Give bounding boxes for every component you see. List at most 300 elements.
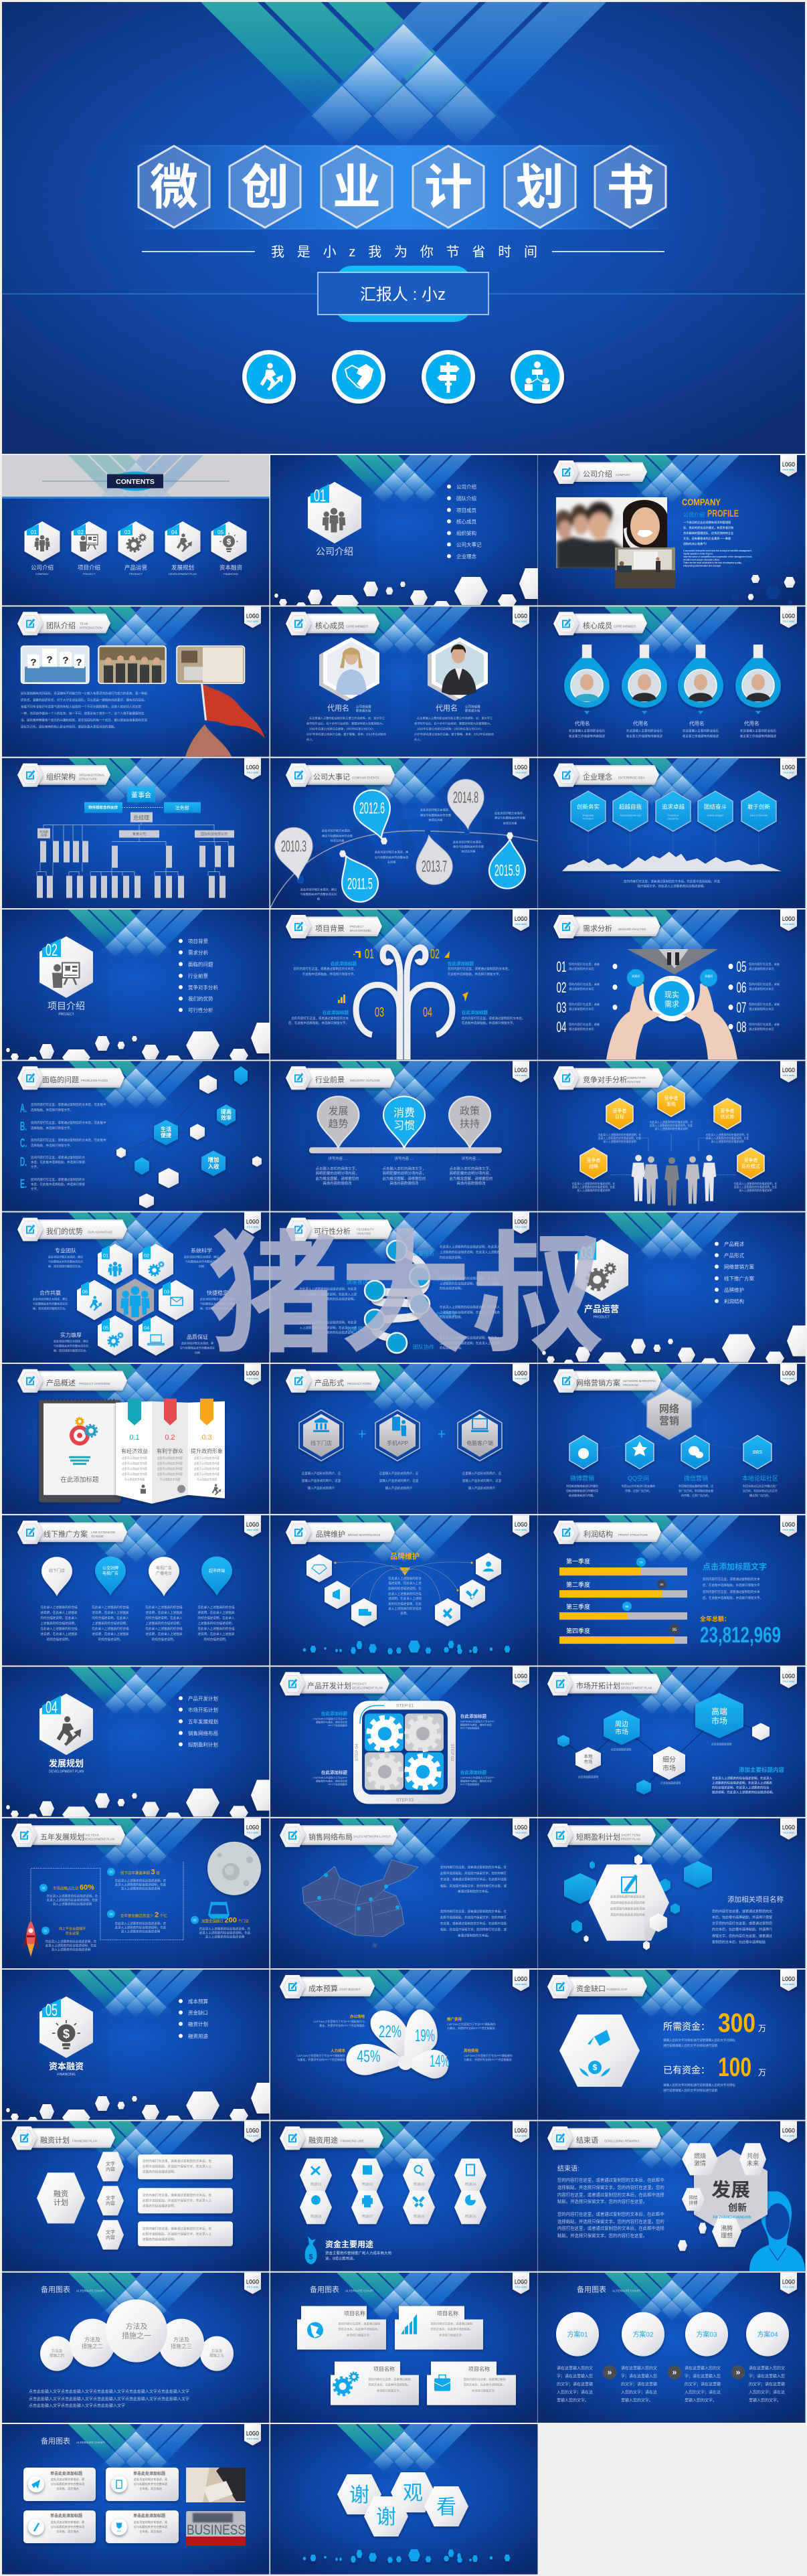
- section numbers: 04: [171, 529, 177, 535]
- card text: 言风格，语言描述: [56, 2486, 80, 2491]
- side heading: 点击添加标题文字: [703, 1561, 767, 1571]
- header tab: 融资计划: [40, 2136, 70, 2144]
- member paragraphs: 在这里输入主要的职业经历和主要工作成绩等，如：某大学工: [417, 715, 492, 720]
- title text: 微: [150, 161, 198, 215]
- small hexagons: 内容: [106, 2234, 115, 2240]
- available funding text: 进行说明请输入您的文字对目标进行说明: [663, 2088, 717, 2093]
- petal percentages: [357, 2023, 450, 2071]
- card text: 此处添加详细文本描述，建: [51, 2477, 85, 2482]
- left text: [569, 962, 600, 1031]
- closing paragraph 1: 粘贴，并选择只保留文字。您的内容打在这里。: [557, 2198, 647, 2204]
- logo flag: TITLE HERE: [515, 1226, 527, 1229]
- slide: brand maintenance: [270, 1515, 538, 1666]
- centre text: 图表的综合描述说明，在: [388, 1586, 422, 1591]
- thanks characters: [349, 2482, 456, 2528]
- plan text 4: 请在这里输入您的文: [749, 2366, 785, 2371]
- org connectors: [37, 823, 228, 876]
- idea labels: [577, 804, 770, 821]
- event descriptions: 此处添加详细文本描述，: [322, 829, 353, 833]
- available funding: 100: [718, 2053, 751, 2082]
- right text: 您的内容打在这里，或者: [749, 962, 780, 966]
- hexagon labels: 优劣势: [720, 1114, 735, 1120]
- logo flag: [513, 1818, 529, 1840]
- member paragraphs: 商学院毕业后，有十余年行业经验，掌握领导能力及管理能力。: [414, 721, 492, 725]
- plan labels: [567, 2330, 778, 2339]
- use icons: [310, 2164, 476, 2207]
- reporter box: 汇报人 : 小z: [360, 286, 446, 304]
- hexagon labels: 入收: [207, 1163, 219, 1170]
- step text right top: [460, 1713, 495, 1729]
- contents badge: [42, 471, 230, 491]
- card text: 此框中选择粘贴，并选择只保留文字。在此录入上: [143, 2164, 211, 2168]
- advantage text: 格，语言描述尽量简洁生动。: [54, 1348, 88, 1352]
- pin text 3: [145, 1605, 183, 1642]
- section labels: 项目介绍: [78, 564, 100, 571]
- channel icons: [578, 1442, 762, 1459]
- event bubble 2015.9: [488, 837, 528, 890]
- quadrant text 4: [462, 1009, 525, 1025]
- card headings: 项目名称: [468, 2366, 490, 2373]
- header tab: [286, 1521, 395, 1544]
- card text: 您的内容打在这里，或者通过复制您的文本后，在: [143, 2158, 211, 2163]
- section hexagons: [24, 521, 246, 562]
- chart title: [41, 2285, 105, 2294]
- card text: [339, 2322, 505, 2393]
- step text left bottom: 在此添加标题: [321, 1769, 348, 1775]
- plan labels: 方案04: [757, 2330, 778, 2339]
- rocket: [23, 1921, 39, 1957]
- event bubble 2013.7: [411, 832, 455, 887]
- pin: development trend: 发展: [328, 1106, 349, 1117]
- chapter label: [49, 1758, 84, 1774]
- channel labels: [570, 1474, 778, 1482]
- card text: 您的文本后，在此框中选择粘贴，: [339, 2327, 380, 2332]
- main hexagon text: 此处添加标题内容此处此处: [610, 1895, 645, 1899]
- available funding: 万: [758, 2068, 766, 2077]
- fold titles: 有经济效益: [121, 1448, 148, 1454]
- fold text: 这里可以添加文字内容: [122, 1467, 147, 1470]
- plan labels: 方案01: [567, 2330, 588, 2339]
- header tab: FINANCING PLAN: [72, 2139, 97, 2142]
- slide: chapter 03: [538, 1213, 807, 1369]
- event descriptions: 格: [317, 897, 321, 901]
- advantage text: 此处添加详细文本描述，建议: [54, 1339, 88, 1343]
- logo flag: LOGO: [246, 612, 259, 619]
- header tab: COMPANY: [616, 473, 630, 477]
- header tab: SHORT TERM: [621, 1834, 640, 1837]
- slide: five year plan: [2, 1818, 269, 1968]
- department labels: 国际科技有限公司: [201, 832, 228, 837]
- quadrant text 2: 您的内容打在这里，或者通过复制您的文本后，: [448, 966, 511, 971]
- problem letters: E.: [20, 1177, 27, 1191]
- pin text 3: 上述图表的综合描述说明，: [145, 1621, 183, 1626]
- timeline markers: [297, 828, 513, 883]
- use labels: 用途05: [464, 2213, 476, 2219]
- callout staff: 与美化，并提供专业的PPT个性定制服务: [297, 2057, 345, 2061]
- chart text: 点击此处输入文字点击此处输入文字点击此处输入文字: [29, 2403, 125, 2409]
- member captions: 职务或头衔: [356, 708, 371, 713]
- method labels: 措施之四: [50, 2353, 64, 2358]
- left text: 通过复制您的文本后: [569, 966, 594, 971]
- market labels: 细分: [662, 1755, 676, 1764]
- logo flag: TITLE HERE: [515, 1377, 527, 1380]
- fold titles: 0.3: [201, 1434, 212, 1442]
- team paragraph: 一样，共同协作维持一个人的生存，缺一不可。如果没有了其中一个，这个人将不能健康的生: [21, 711, 145, 715]
- contents badge: CONTENTS: [116, 478, 155, 486]
- quadrant text 1: [293, 960, 357, 976]
- logo flag: [513, 1213, 529, 1234]
- header tab: NETWORK MARKETING: [623, 1379, 656, 1383]
- company text: 念，良好的资金运作模式，有竞争意识和: [683, 525, 733, 530]
- slide: alternate chart cards: [270, 2273, 538, 2423]
- fold text: 这里可以添加文字内容: [122, 1456, 147, 1460]
- petal percentages: 14%: [430, 2052, 450, 2071]
- advantage text: 此处添加详细文本描述，建议: [48, 1254, 83, 1258]
- header tab: [17, 612, 110, 635]
- member paragraphs: 2007年担任某公司执行总裁，善于策略、思考，2012年任创始合: [414, 732, 495, 736]
- pin text column 3: 此为概念图解，请根据您的: [450, 1176, 492, 1181]
- bullet list: 面临的问题: [188, 961, 213, 968]
- photo: business team: [98, 646, 166, 683]
- member text: [569, 728, 776, 738]
- card text: 您的内容打在这里，或者通过复制: [339, 2322, 380, 2326]
- chart text: [29, 2389, 189, 2409]
- side text: 您的内容打在这里，或者通过复制您的文: [712, 1909, 772, 1914]
- side text: 文字您的内容打在这里，或者通过复制您: [712, 1921, 772, 1926]
- slide: chapter 02: [2, 910, 278, 1066]
- fold text: 这里可以添加文字内容: [194, 1456, 219, 1460]
- chapter label: 产品运营: [584, 1304, 619, 1314]
- fold pages: [116, 1401, 225, 1504]
- advantage text: 风格: [195, 1351, 200, 1355]
- header tab: BRAND MAINTENANCE: [348, 1533, 381, 1537]
- pin text 4: 在此录入上述图表的综合描: [197, 1626, 235, 1631]
- bullet list: 需求分析: [188, 949, 208, 956]
- header tab: [280, 1975, 375, 1998]
- member names: [575, 719, 759, 726]
- left text: 通过复制您的文本后: [569, 1027, 594, 1031]
- logo flag: LOGO: [515, 1824, 527, 1831]
- pin text 3: 在此录入上述图表的综合描: [145, 1626, 183, 1631]
- market labels: 高端: [711, 1706, 727, 1716]
- thanks characters: 看: [436, 2496, 456, 2518]
- market labels: 市场: [584, 1758, 593, 1764]
- node text: [300, 1245, 500, 1351]
- quadrant text 4: 在此框中选择粘贴，并选择只保留文字。: [462, 1021, 516, 1025]
- logo flag: LOGO: [782, 1672, 795, 1679]
- header tab: DEVELOPMENT PLAN: [352, 1686, 383, 1689]
- centre text: 此录入上述图表的综合描: [388, 1592, 422, 1596]
- side text: 描述说明，在此录入上述图表的综合描述说明。: [712, 1790, 775, 1794]
- node text: 上述图表的综合描述说明，在此录入上述图表: [440, 1281, 500, 1286]
- team paragraph: 目标为己任。团队精神的核心是合作协同，使团队最大发挥创造的潜能。: [21, 724, 117, 729]
- card headings: 项目名称: [437, 2310, 458, 2317]
- quarter 1 bar: 70: [639, 1561, 643, 1564]
- cluster labels: 燃烧: [694, 2152, 706, 2159]
- plan item 01: [41, 1927, 97, 1952]
- header tab: 企业理念: [583, 772, 612, 782]
- header tab: [547, 1824, 656, 1847]
- hexagon labels: 竞争者: [613, 1108, 626, 1114]
- hexagon labels: 竞争者: [720, 1108, 735, 1114]
- logo flag: LOGO: [782, 1370, 795, 1377]
- dotted connectors: [610, 1134, 735, 1175]
- step text left bottom: 模板制作与美化，拥有符合您: [316, 1779, 347, 1782]
- slide: concluding remarks: [538, 2121, 806, 2271]
- pin text 2: 述说明，在此录入上述图表: [92, 1610, 129, 1615]
- left text: 您的内容打在这里，或者: [569, 1022, 600, 1027]
- header tab: [547, 1672, 661, 1695]
- event bubble 2010.3: 2010.3: [281, 838, 306, 856]
- logo flag: LOGO: [515, 1218, 527, 1225]
- chapter hexagon: [308, 482, 361, 543]
- closing paragraph 2: 您的内容打在这里，或者通过复制您的文本后，在此框中: [557, 2211, 664, 2217]
- member text: 和主要工作成绩等内容描述: [683, 734, 719, 738]
- logo flag: TITLE HERE: [247, 2134, 258, 2137]
- thanks characters: 观: [403, 2482, 423, 2504]
- closing paragraph 1: 内容打在这里，或者通过复制您的文本后，在此框中选择: [557, 2191, 664, 2197]
- inbox icon: [208, 1902, 230, 1919]
- callout office: [313, 2014, 365, 2027]
- hands holding circle: [606, 976, 737, 1059]
- logo flag: LOGO: [782, 461, 795, 468]
- plan text 2: 字；请在这里输入您: [621, 2374, 657, 2379]
- side heading: 添加主要标题内容: [739, 1766, 784, 1773]
- slide: our advantage: [2, 1213, 269, 1363]
- card text: 您的内容打在这里，或者通过复制: [464, 2377, 505, 2382]
- hexagon descriptions: 录入上述图表的综合描述说明: [739, 1189, 772, 1192]
- node text: 上述图表的综合描述说明，在此录入上述图表: [440, 1250, 500, 1254]
- advantage text: 与标题相关并符合整体语言风: [33, 1301, 68, 1305]
- problem letters: B.: [20, 1120, 27, 1133]
- side text top: 者通过复制您的文本后。: [458, 1889, 491, 1894]
- step text right bottom: 在此添加标题: [460, 1769, 487, 1775]
- logo flag: TITLE HERE: [515, 620, 527, 622]
- header tab: [286, 612, 379, 635]
- company text: capital operation mode of good,: [683, 553, 713, 555]
- bullet list: 市场开拓计划: [188, 1706, 218, 1713]
- plan text 1: 的文字；请在这里输: [557, 2382, 593, 2387]
- bottom dots: [302, 1640, 510, 1654]
- photo: question marks: ?: [46, 654, 53, 665]
- plan text 4: 里输入您的文字。: [749, 2398, 781, 2403]
- slide: problems faced: [2, 1061, 269, 1211]
- chart title: [41, 2436, 105, 2445]
- pin: consumption habit: 习惯: [393, 1120, 415, 1132]
- problem text: 您的内容打在这里，或者通过复制您的文本后，在此框中: [31, 1138, 106, 1142]
- slide: company profile: [538, 455, 806, 605]
- event descriptions: 此处添加详细文本描述，: [420, 808, 451, 812]
- idea labels: United struggle: [707, 814, 723, 817]
- main hexagon: 营销: [659, 1415, 679, 1427]
- slide: market development plan: [538, 1666, 806, 1817]
- logo flag: LOGO: [246, 1521, 259, 1528]
- fold icons: [141, 1484, 221, 1495]
- closing paragraph 2: 内容打在这里，或者通过复制您的文本后，在此框中选择: [557, 2225, 664, 2231]
- plan item 01: 01: [43, 1929, 48, 1933]
- hexagon descriptions: 此录入上述图表的综合描述说明，在此: [706, 1136, 749, 1140]
- slide: feasibility analysis: [270, 1213, 538, 1363]
- connectors: [79, 2171, 97, 2231]
- hexagon field: [274, 568, 546, 612]
- section tags: [27, 524, 226, 535]
- card text: 此处添加详细文本描述，建: [51, 2520, 85, 2524]
- small hexagons: 文字: [106, 2195, 115, 2201]
- logo flag: TITLE HERE: [515, 772, 527, 774]
- node labels: [347, 1250, 457, 1351]
- card text: 述图表的综合描述说明。: [143, 2203, 177, 2208]
- logo flag: TITLE HERE: [783, 2134, 794, 2137]
- right text: 通过复制您的文本后: [749, 1007, 774, 1011]
- thanks hexagons: [337, 2472, 468, 2537]
- company heading: 公司介绍: [683, 511, 705, 518]
- member paragraphs: 伙人。: [306, 738, 315, 741]
- card text: 议与标题相关并符合整体语: [51, 2482, 84, 2486]
- callout other: [464, 2048, 513, 2061]
- summary text: [624, 879, 720, 889]
- logo flag: LOGO: [246, 1218, 259, 1225]
- card text: 并选择只保留文字。: [439, 2333, 464, 2338]
- slide: organisation chart: [2, 758, 269, 908]
- node text: 的综合描述说明。: [440, 1286, 464, 1290]
- card text: 言风格，语言描述: [139, 2529, 163, 2534]
- pin text 1: 的综合描述说明。: [47, 1637, 71, 1642]
- section numbers: [31, 530, 223, 534]
- product labels: 手机APP: [387, 1440, 408, 1446]
- product text: 里输入产品形式的简介，这里: [379, 1478, 419, 1483]
- step text left top: 在此添加标题: [321, 1710, 348, 1716]
- fold text: 这里可以添加文字内容: [157, 1456, 183, 1460]
- event descriptions: 此处添加详细文本描述，建议: [300, 887, 337, 892]
- chapter hexagon: 04: [46, 1698, 58, 1717]
- gears: [369, 1717, 439, 1788]
- photo: call centre: [554, 497, 667, 570]
- card headings: 单击此处添加标题: [50, 2471, 82, 2476]
- pin labels: 公交站牌: [102, 1565, 118, 1571]
- photo: question marks: ?: [62, 655, 69, 666]
- hexagon descriptions: 录入上述图表的综合描述说明: [711, 1140, 744, 1143]
- main hexagon text: 添加内容此处此处添加内容: [610, 1901, 645, 1905]
- problem text: 文字。: [31, 1187, 40, 1191]
- advantage labels: 品质保证: [187, 1333, 208, 1340]
- member text: 和主要工作成绩等内容描述: [569, 734, 605, 738]
- company heading: [682, 497, 739, 519]
- slide: sales network: [270, 1818, 538, 1968]
- chapter label: [49, 2061, 84, 2077]
- centre text: 述说明，在此录入上述图: [388, 1596, 422, 1601]
- slide: cost budget: [270, 1970, 538, 2120]
- bullet list: 我们的优势: [188, 995, 213, 1002]
- bullet list: 五年发展规划: [188, 1718, 218, 1725]
- closing paragraph 2: [557, 2211, 664, 2238]
- chart title: ALTERNATE CHART: [76, 2441, 105, 2444]
- market labels: [584, 1706, 727, 1772]
- company text: 进取的决心和勇气！: [683, 541, 709, 546]
- side text top: 您的内容打在这里，或者通过复制您的文本后，在: [440, 1865, 507, 1870]
- header tab: 组织架构: [46, 772, 76, 782]
- fold text: 这里可以添加文字内容: [157, 1472, 183, 1476]
- title hexagons: [139, 146, 666, 228]
- plan item 03: 录入上述图表的综合描述说明: [121, 1887, 161, 1891]
- bullet list: 产品形式: [724, 1252, 744, 1258]
- header tab: INTRODUCTION: [80, 626, 102, 629]
- quarter 4 bar: 95: [672, 1628, 677, 1632]
- logo flag: TITLE HERE: [783, 923, 794, 926]
- closing paragraph 1: 您的内容打在这里，或者通过复制您的文本后，在此框中: [557, 2176, 664, 2182]
- problem text: 选择粘贴，并选择只保留文字。: [31, 1126, 73, 1130]
- china map: [302, 1860, 418, 1948]
- closing heading: 结束语:: [557, 2164, 579, 2172]
- pin text 2: 在此录入上述图表的综合描: [92, 1626, 129, 1631]
- bullet list: 公司介绍: [456, 483, 476, 490]
- method labels: 方法及: [52, 2348, 63, 2354]
- small cyan circles: [627, 969, 717, 986]
- logo flag: [513, 606, 529, 628]
- header tab: 融资用途: [308, 2135, 338, 2144]
- card icons: [307, 2314, 450, 2395]
- chapter label: PRODUCT: [594, 1316, 610, 1320]
- step text right bottom: CAPTAIN工作室致力于专业PPT: [460, 1776, 495, 1779]
- plan item 04: [107, 1910, 167, 1934]
- plan item 02: 02: [41, 1887, 46, 1890]
- info cards: [23, 2468, 179, 2543]
- plan item 02: [39, 1884, 98, 1907]
- chapter hexagon: [39, 936, 93, 998]
- bullet list: 项目背景: [188, 938, 208, 944]
- company heading: PROFILE: [707, 508, 739, 519]
- company text: A successful enterprise must have the concept of scientific management,: [683, 549, 752, 552]
- section labels: 发展规划: [171, 564, 194, 571]
- event descriptions: 体语言风格: [462, 849, 476, 854]
- available funding text: 请输入您的文字对目标进行说明请输入您的文字对目标: [663, 2083, 735, 2087]
- callout other: 其他费用: [464, 2048, 478, 2053]
- slide: alternate chart plans: [538, 2273, 806, 2423]
- side text bottom: 您的内容打在这里，或者通过复制您的文本后，在: [440, 1909, 507, 1914]
- plan item 04: 在此录入上述图表的综合描述说明，在: [115, 1921, 167, 1926]
- text cards: [138, 2154, 233, 2246]
- hexagon descriptions: 此录入上述图表的综合描述说明，在此: [598, 1136, 641, 1140]
- use labels: 用途06: [413, 2213, 425, 2219]
- member names: 代用名: [689, 719, 704, 726]
- event descriptions: 体语言风格: [429, 818, 443, 823]
- slide: alternate chart circles: [2, 2273, 269, 2423]
- advantage text: 与标题相关并符合整体语言风: [54, 1344, 88, 1348]
- advantage text: [33, 1254, 235, 1355]
- channel text: 的传播，达到广告目的。: [681, 1493, 711, 1497]
- left text: 您的内容打在这里，或者: [569, 982, 600, 986]
- method labels: 方法及: [211, 2348, 223, 2354]
- plan item 03: 线下店年覆盖率超 3 倍: [120, 1869, 160, 1877]
- slide: product development plan: [270, 1666, 538, 1817]
- section numbers: 05: [217, 529, 223, 535]
- numbers right: 08: [736, 1019, 747, 1035]
- pin text column 2: [383, 1156, 426, 1186]
- pin text column 3: 点击输入本栏的具体文字，: [450, 1166, 492, 1171]
- member text: 在这里输入主要的职业经历: [626, 728, 662, 733]
- advantage text: 此处添加详细文本描述，建议: [33, 1297, 68, 1301]
- fold text: [122, 1456, 219, 1481]
- fold text: 可以添加文字内容: [160, 1478, 180, 1481]
- header tab: 核心成员: [583, 620, 612, 630]
- plan item 02: 在此录入上述图表的综合描述说明，在: [47, 1894, 98, 1899]
- header tab: [553, 764, 659, 787]
- plan text 3: [685, 2366, 721, 2403]
- small hexagons: 内容: [106, 2166, 115, 2172]
- pin text 2: 在此录入上述图表的综合描: [92, 1605, 129, 1610]
- node text: 的综合描述说明。: [440, 1256, 464, 1260]
- competitor hexagons: [580, 1086, 764, 1179]
- header tab: PROJECT: [350, 925, 364, 928]
